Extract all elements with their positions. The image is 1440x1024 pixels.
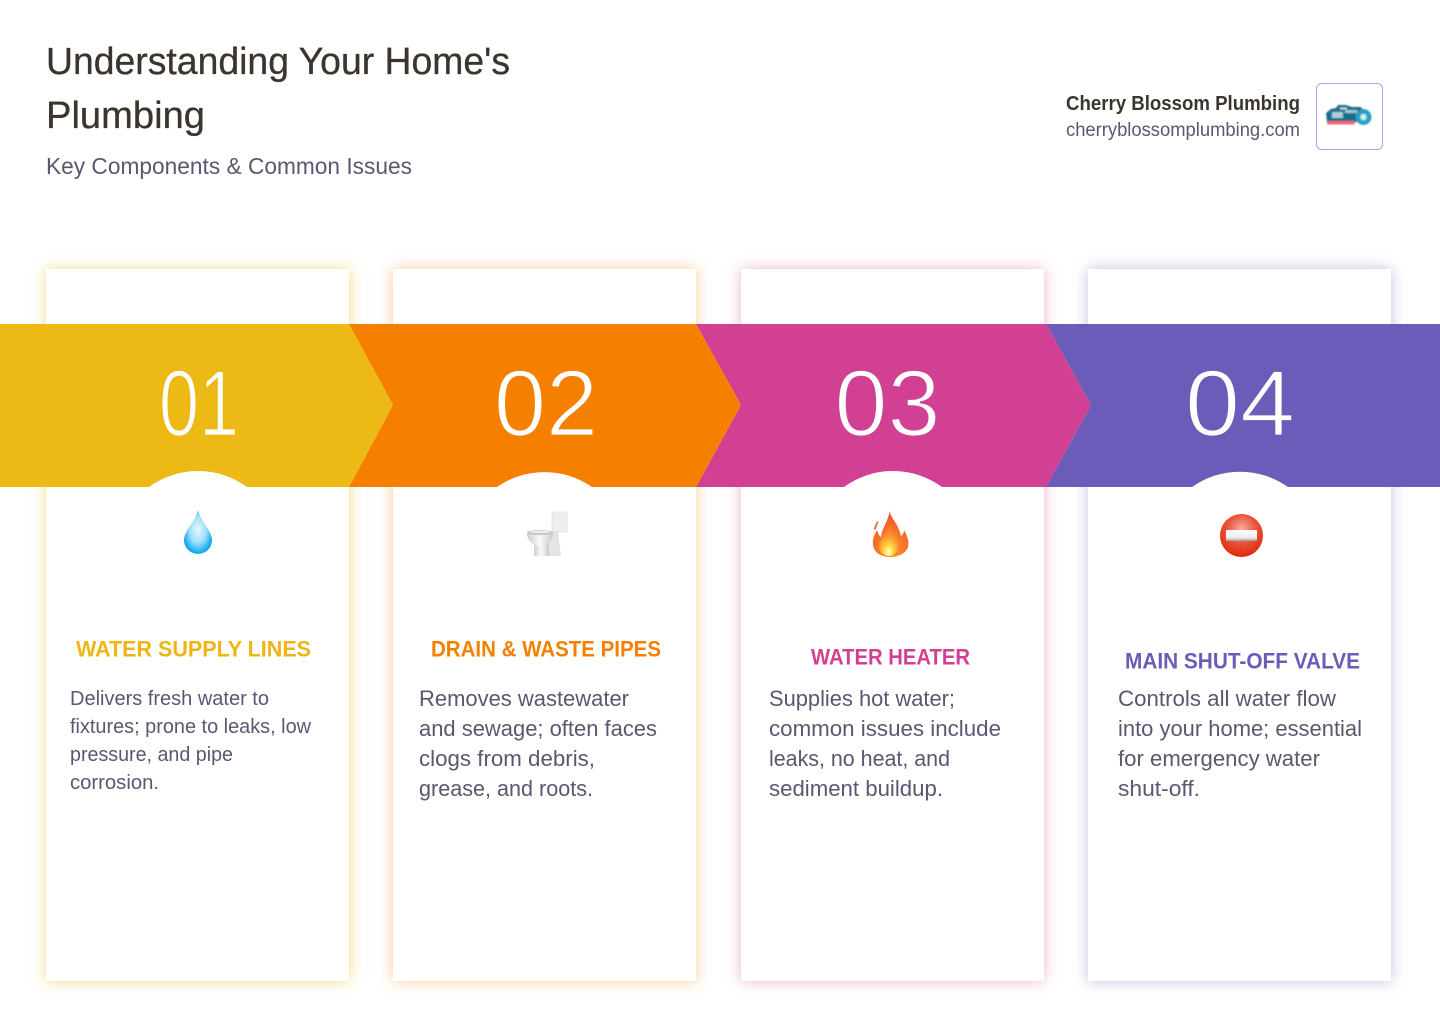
text: water heater description: leaks, no heat, and	[769, 746, 950, 771]
step 02 chevron	[349, 324, 741, 487]
text: water supply description: Delivers fresh water to	[70, 688, 269, 710]
step 01 chevron: 01	[159, 350, 239, 456]
text: water supply description: pressure, and pipe	[70, 744, 233, 766]
step 03 chevron	[696, 324, 1091, 487]
title: Plumbing	[46, 95, 205, 137]
text: shut-off valve description: into your home; essential	[1118, 716, 1362, 741]
step 04 chevron: 04	[1185, 350, 1295, 456]
title	[46, 41, 510, 137]
text: water heater description: common issues include	[769, 716, 1001, 741]
panel: water heater	[741, 269, 1044, 981]
text: water supply description	[70, 688, 312, 794]
text: shut-off valve description: Controls all water flow	[1118, 686, 1336, 711]
text: water heater description: sediment buildup.	[769, 776, 943, 801]
text: shut-off valve description: for emergency water	[1118, 746, 1320, 771]
text: water supply description: fixtures; prone to leaks, low	[70, 716, 312, 738]
icon: no entry	[1220, 514, 1263, 557]
subtitle: Key Components & Common Issues	[46, 153, 412, 179]
title: Understanding Your Home's	[46, 41, 510, 83]
text: shut-off valve description	[1118, 686, 1362, 801]
company website: cherryblossomplumbing.com	[1066, 120, 1300, 141]
step 03 chevron: 03	[834, 350, 940, 456]
text: drain description: Removes wastewater	[419, 686, 629, 711]
panel: water supply lines	[46, 269, 349, 981]
icon: toilet	[527, 512, 567, 556]
step 01 chevron	[0, 324, 393, 487]
text: water heater description	[769, 686, 1001, 801]
text: drain description: clogs from debris,	[419, 746, 595, 771]
company name: Cherry Blossom Plumbing	[1066, 93, 1300, 115]
header: title block	[46, 41, 1383, 179]
heading: water supply lines: WATER SUPPLY LINES	[76, 636, 311, 662]
heading: main shut-off valve: MAIN SHUT-OFF VALVE	[1125, 648, 1360, 674]
logo badge	[1316, 84, 1382, 150]
step 04 chevron	[1046, 324, 1440, 487]
text: drain description	[419, 686, 657, 801]
heading: drain and waste pipes: DRAIN & WASTE PIPES	[431, 636, 661, 662]
text: water heater description: Supplies hot water;	[769, 686, 955, 711]
step 02 chevron: 02	[494, 350, 598, 456]
heading: water heater: WATER HEATER	[811, 644, 970, 670]
text: shut-off valve description: shut-off.	[1118, 776, 1200, 801]
text: drain description: grease, and roots.	[419, 776, 593, 801]
text: water supply description: corrosion.	[70, 772, 159, 794]
text: drain description: and sewage; often faces	[419, 716, 657, 741]
icon: fire	[873, 510, 908, 557]
panel: drain and waste pipes	[393, 269, 696, 981]
panel: main shut-off valve	[1088, 269, 1391, 981]
icon: water drop	[184, 510, 212, 554]
